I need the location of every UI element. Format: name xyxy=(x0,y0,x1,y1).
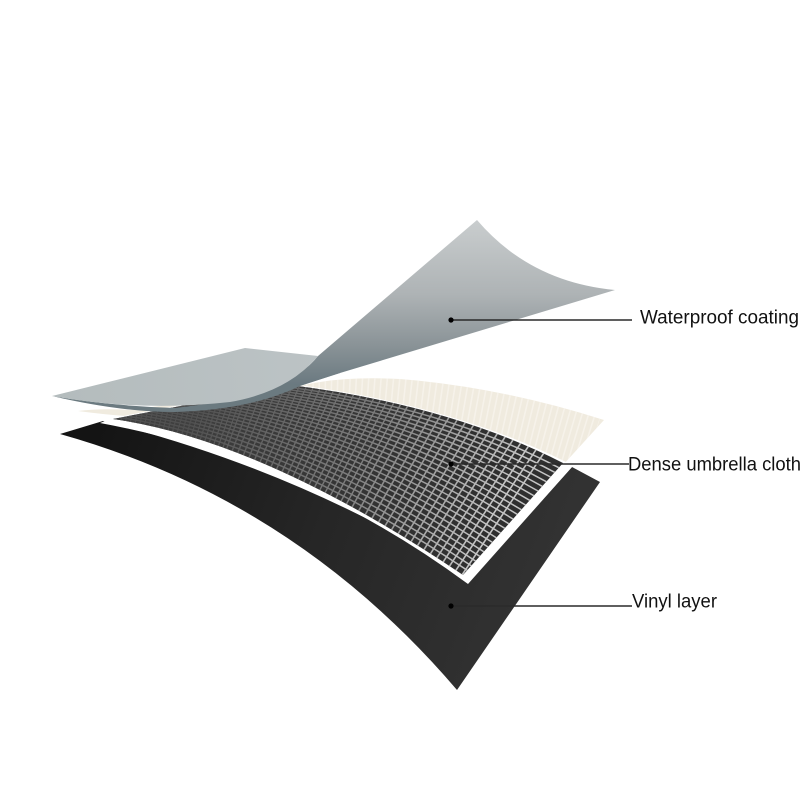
callout: vinyl layer: Vinyl layer xyxy=(632,592,718,612)
callout: waterproof coating: Waterproof coating xyxy=(640,308,799,328)
layer: waterproof coating peeled sheet xyxy=(52,220,615,412)
raised flap of coating xyxy=(285,220,615,386)
callout: dense umbrella cloth xyxy=(448,454,800,476)
layer: dense umbrella cloth mesh xyxy=(113,386,563,575)
layer: white border of cloth xyxy=(100,384,572,584)
layer: vinyl layer xyxy=(60,421,600,690)
callout: waterproof coating xyxy=(448,308,799,328)
callout: vinyl layer xyxy=(448,592,718,612)
flat front of coating xyxy=(52,348,318,406)
layer: cream backing xyxy=(78,378,604,465)
underside of coating xyxy=(52,350,340,412)
